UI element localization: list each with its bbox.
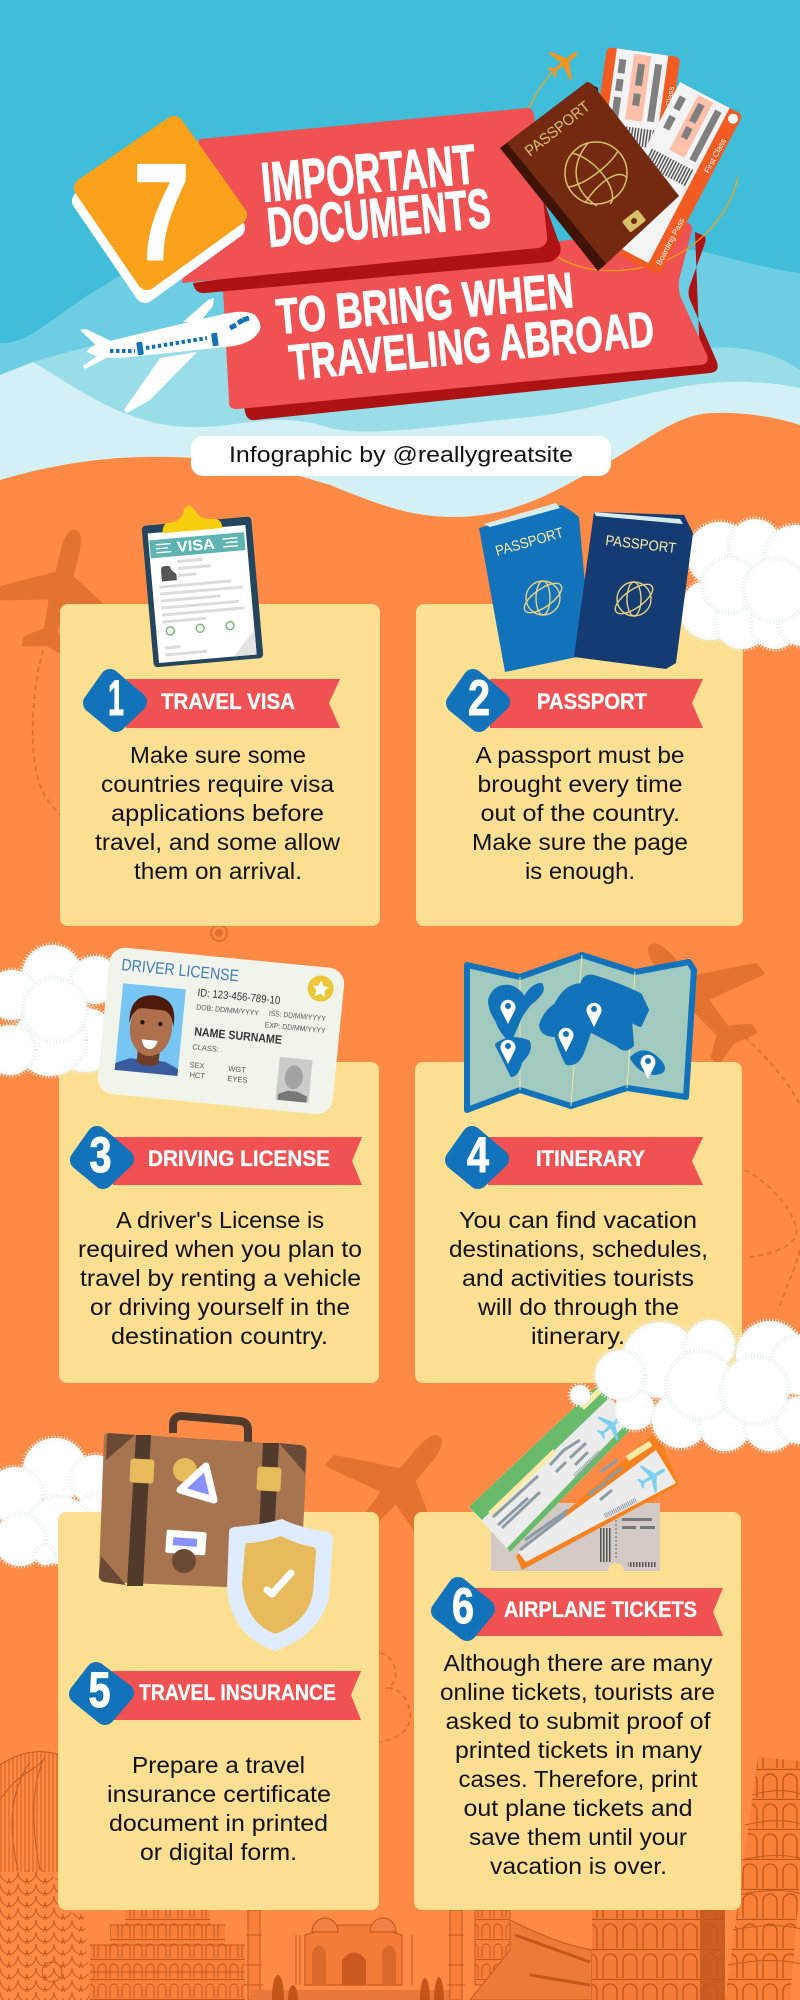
body text: [95, 742, 340, 884]
badge: 2: 2: [468, 670, 490, 726]
badge: 5: [79, 1662, 124, 1718]
ribbon: airplane tickets: [475, 1588, 723, 1636]
landmark: taj mahal: [250, 1918, 458, 2000]
badge: 4: 4: [467, 1127, 489, 1183]
background plane: upper left: [0, 516, 136, 665]
wave: lightest blue: [0, 362, 800, 520]
card 3 background: [59, 1062, 379, 1383]
boarding pass front: Boarding Pass: [654, 217, 686, 267]
title line: important: IMPORTANT: [258, 132, 478, 214]
body text: [472, 742, 688, 884]
visa label: VISA: [176, 536, 216, 556]
card 1 content: [93, 670, 340, 884]
license sex: SEX: [189, 1060, 205, 1071]
heading: itinerary: ITINERARY: [536, 1146, 645, 1171]
dark passport label: PASSPORT: [605, 533, 677, 557]
byline pill: [191, 436, 611, 476]
badge: 4: [455, 1127, 499, 1183]
landmark: colosseum arches: [592, 1910, 725, 2000]
heading: airplane tickets: AIRPLANE TICKETS: [504, 1597, 697, 1622]
title line: documents: DOCUMENTS: [264, 176, 493, 259]
ribbon: itinerary: [488, 1137, 703, 1185]
passport chip: [622, 209, 646, 233]
cloud: behind lower left card: [0, 1438, 132, 1566]
body text: or driving yourself in the: [90, 1294, 350, 1320]
location target icon: [211, 925, 227, 941]
header banner: upper ribbon shadow: [193, 190, 561, 293]
header banner: upper ribbon: [182, 108, 547, 283]
body text: save them until your: [469, 1824, 687, 1850]
heading: driving license: DRIVING LICENSE: [148, 1146, 330, 1171]
body text: Make sure the page: [472, 829, 688, 855]
license small photo: [276, 1057, 313, 1103]
wave: pale blue: [0, 335, 800, 520]
card 2 background: [416, 604, 743, 926]
light passport globe: [520, 578, 566, 618]
continents: [490, 977, 663, 1075]
ribbon: travel visa: [126, 679, 340, 728]
body text: You can find vacation: [459, 1207, 697, 1233]
body text: A driver's License is: [116, 1207, 324, 1233]
orange page background: [0, 413, 800, 2000]
license star badge: [306, 974, 335, 1003]
dashed flight path: left: [33, 650, 60, 815]
landmark: colosseum side: [470, 1910, 592, 2000]
body text: them on arrival.: [134, 858, 302, 884]
body text: is enough.: [525, 858, 635, 884]
badge: 6: 6: [452, 1578, 474, 1634]
license name: NAME SURNAME: [194, 1024, 283, 1047]
cloud: middle left: [0, 945, 119, 1076]
illustration: world map: [467, 955, 694, 1110]
ribbon: driving license: [113, 1137, 362, 1185]
badge: 1: 1: [108, 670, 124, 726]
card 6 background: [414, 1512, 741, 1910]
body text: applications before: [111, 800, 324, 826]
body text: printed tickets in many: [455, 1737, 703, 1763]
passport cover: [500, 82, 679, 271]
background plane: centre: [302, 1395, 490, 1583]
card 5 background: [58, 1512, 379, 1910]
boarding pass back: [581, 47, 680, 245]
license weight: WGT: [228, 1064, 247, 1075]
title line: to bring when: TO BRING WHEN: [274, 262, 576, 345]
byline text: Infographic by @reallygreatsite: [229, 442, 573, 467]
number 7: 7: [134, 136, 189, 288]
landmark: merlion: [0, 1752, 90, 2000]
boarding pass front: [596, 82, 743, 275]
body text: insurance certificate: [107, 1781, 331, 1807]
card 4 background: [415, 1062, 742, 1383]
body text: [78, 1207, 362, 1349]
badge: 6: [441, 1578, 485, 1634]
license id: ID: 123-456-789-10: [197, 987, 281, 1007]
body text: Prepare a travel: [132, 1752, 305, 1778]
body text: A passport must be: [476, 742, 684, 768]
illustration: suitcase: [99, 1416, 307, 1590]
body text: countries require visa: [101, 771, 334, 797]
landmark: minaret right: [447, 1910, 465, 2000]
body text: Although there are many: [444, 1650, 713, 1676]
landmark: leaning tower: [725, 1757, 800, 2000]
card 6 content: [440, 1578, 723, 1879]
illustration: shield: [227, 1519, 333, 1651]
body text: cases. Therefore, print: [458, 1766, 698, 1792]
body text: [107, 1752, 331, 1865]
badge: 3: [80, 1127, 124, 1183]
body text: or digital form.: [140, 1839, 297, 1865]
map pins: [500, 1000, 656, 1079]
body text: vacation is over.: [490, 1853, 667, 1879]
illustration: blue passports: [479, 503, 693, 672]
cloud: middle right: [570, 1320, 800, 1451]
card 1 background: [60, 604, 380, 926]
body text: [440, 1650, 715, 1879]
license heading: DRIVER LICENSE: [121, 956, 240, 985]
body text: out plane tickets and: [464, 1795, 692, 1821]
number diamond shadow: [82, 139, 235, 293]
illustration: visa clipboard: [140, 500, 263, 667]
header banner: lower ribbon: [223, 223, 708, 409]
body text: [449, 1207, 708, 1349]
badge: 2: [456, 670, 500, 726]
sky background: [0, 0, 800, 520]
landmark: palace of winds: [90, 1910, 245, 2000]
license issue date: ISS: DD/MM/YYYY: [269, 1009, 326, 1023]
body text: destination country.: [111, 1323, 328, 1349]
small orange plane: [541, 39, 588, 86]
light passport label: PASSPORT: [494, 525, 566, 560]
body text: travel, and some allow: [95, 829, 340, 855]
white airplane: [80, 298, 260, 413]
body text: Make sure some: [130, 742, 306, 768]
card 2 content: [456, 670, 703, 884]
number diamond: [84, 126, 237, 280]
license eyes: EYES: [227, 1074, 248, 1085]
body text: itinerary.: [531, 1323, 625, 1349]
first class label: First Class: [662, 86, 676, 125]
background plane: upper right: [600, 903, 788, 1091]
cloud: upper right: [680, 519, 800, 649]
dark passport globe: [611, 579, 657, 619]
dashed flight path: right upper: [745, 1037, 800, 1105]
dashed flight path: centre: [380, 1653, 410, 1742]
ribbon: passport: [490, 679, 703, 728]
header banner: lower ribbon shadow: [244, 232, 718, 420]
title line: traveling abroad: TRAVELING ABROAD: [287, 301, 656, 391]
ribbon: travel insurance: [112, 1671, 361, 1720]
body text: document in printed: [109, 1810, 328, 1836]
dashed flight path: right lower: [745, 1170, 800, 1310]
body text: travel by renting a vehicle: [80, 1265, 361, 1291]
license date of birth: DOB: DD/MM/YYYY: [196, 1002, 259, 1018]
heading: travel visa: TRAVEL VISA: [161, 689, 295, 714]
license expiry date: EXP: DD/MM/YYYY: [264, 1020, 326, 1035]
body text: and activities tourists: [462, 1265, 694, 1291]
body text: brought every time: [478, 771, 682, 797]
license class: CLASS:: [192, 1042, 219, 1054]
landmark: minaret left: [245, 1910, 263, 2000]
body text: online tickets, tourists are: [440, 1679, 715, 1705]
body text: out of the country.: [480, 800, 680, 826]
card 3 content: [78, 1127, 362, 1349]
badge: 3: 3: [90, 1127, 112, 1183]
body text: destinations, schedules,: [449, 1236, 708, 1262]
badge: 5: 5: [88, 1662, 110, 1718]
globe emblem: [565, 142, 627, 206]
license height: HCT: [189, 1070, 206, 1081]
card 5 content: [79, 1662, 361, 1865]
heading: passport: PASSPORT: [537, 689, 648, 714]
body text: required when you plan to: [78, 1236, 362, 1262]
body text: asked to submit proof of: [446, 1708, 711, 1734]
pass labels: First Class: [703, 137, 728, 175]
illustration: tickets: [469, 1385, 679, 1571]
body text: will do through the: [477, 1294, 679, 1320]
wave: mid blue: [0, 236, 800, 520]
illustration: driver license: [96, 946, 346, 1116]
orbit line: [516, 72, 738, 271]
badge: 1: [93, 670, 137, 726]
heading: travel insurance: TRAVEL INSURANCE: [139, 1680, 336, 1705]
card 4 content: [449, 1127, 708, 1349]
passport label: PASSPORT: [522, 98, 594, 160]
license photo: [115, 983, 186, 1076]
